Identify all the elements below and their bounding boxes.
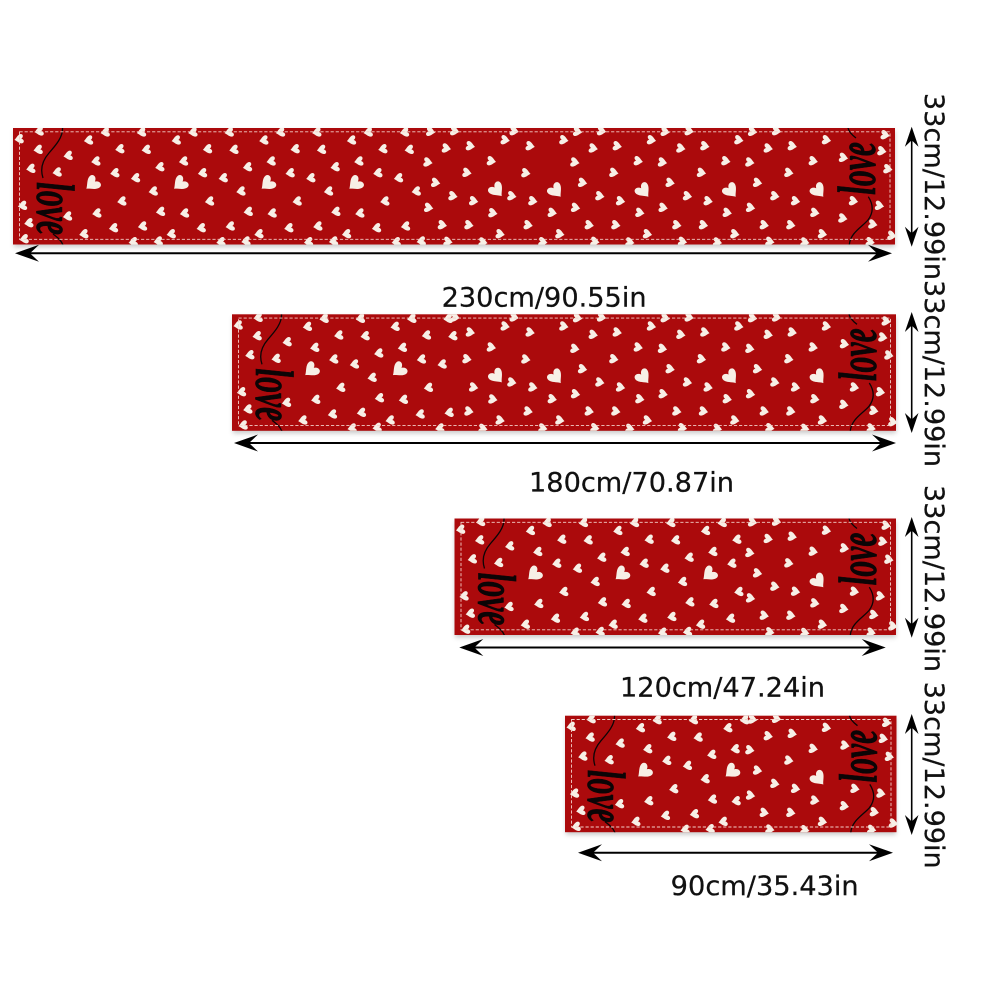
arrow: 180cm width [234,434,896,452]
arrow: 230cm runner height [905,127,918,247]
love text right: love [828,730,888,783]
runner: 120cm [454,516,898,638]
fabric 230cm [13,128,895,244]
label: 90cm width: 90cm/35.43in [671,871,859,902]
runner: 230cm [13,126,897,248]
stitching 230cm [20,132,890,239]
stitching 180cm [238,318,890,426]
fabric 90cm [565,716,896,832]
love text right: love [828,328,888,381]
label: 120cm width: 120cm/47.24in [620,672,825,704]
arrow: 90cm runner height [905,714,918,835]
arrow: 120cm width [459,639,886,656]
love text left: love [25,182,85,235]
stitching 90cm [572,720,891,827]
label: height 4: 33cm/12.99in [918,682,949,869]
love text right: love [828,532,888,586]
love text left: love [576,770,636,823]
runner: 180cm [232,312,898,434]
hearts pattern 120cm [455,516,898,638]
arrow: 230cm width [15,245,892,262]
hearts pattern 230cm [14,126,897,248]
label: 230cm width: 230cm/90.55in [442,283,647,314]
hearts pattern 180cm [233,312,898,434]
love text right: love [827,142,887,195]
label: height 3: 33cm/12.99in [918,485,949,672]
label: height 1: 33cm/12.99in [918,93,949,280]
fabric 180cm [232,314,896,431]
stitching 120cm [461,522,890,630]
arrow: 180cm runner height [905,312,918,433]
love text left: love [244,368,304,421]
label: 180cm width: 180cm/70.87in [529,468,734,498]
fabric 120cm [454,518,896,635]
arrow: 120cm runner height [905,517,918,638]
runner: 90cm [565,713,899,835]
love text left: love [466,572,526,626]
label: height 2: 33cm/12.99in [918,280,949,467]
arrow: 90cm width [578,844,893,861]
hearts pattern 90cm [566,713,899,835]
